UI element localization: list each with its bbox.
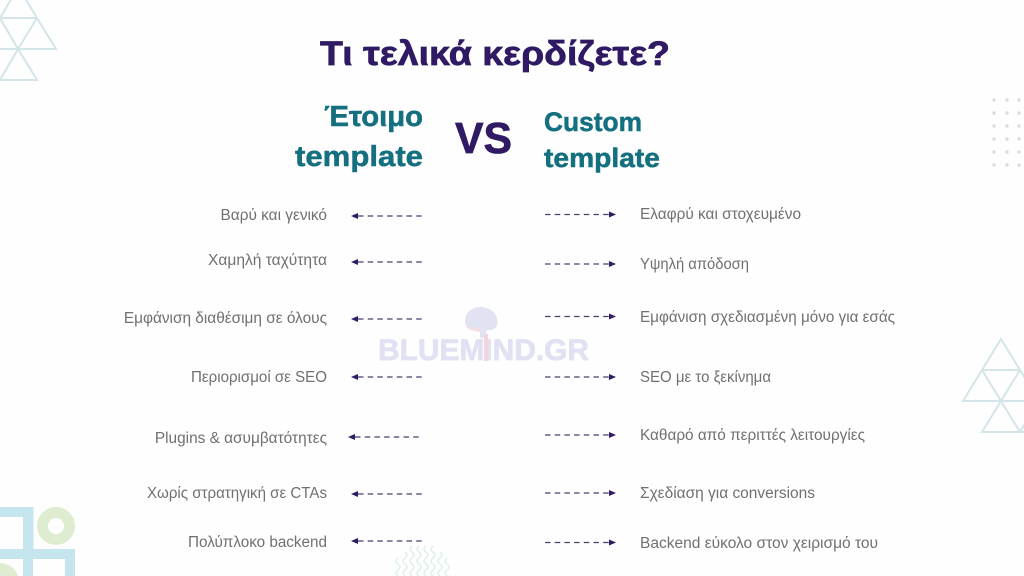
row 1 right (545, 206, 801, 223)
heading: ready template: template (295, 141, 423, 173)
row 7 left: Πολύπλοκο backend (188, 534, 327, 551)
row 5 left (155, 430, 420, 447)
row 4 right: SEO με το ξεκίνημα (640, 369, 771, 386)
row 3 left (124, 310, 423, 327)
row 2 right (545, 256, 749, 273)
heading: ready template (295, 101, 423, 173)
row 3 right: Εμφάνιση σχεδιασμένη μόνο για εσάς (640, 309, 895, 326)
row 4 left (191, 369, 423, 386)
row 7 right: Backend εύκολο στον χειρισμό του (640, 535, 878, 552)
row 3 left: Εμφάνιση διαθέσιμη σε όλους (124, 310, 327, 327)
row 1 left (221, 207, 423, 224)
row 7 left (188, 534, 423, 551)
decoration: blue and green shapes bottom left (0, 507, 75, 576)
row 2 left: Χαμηλή ταχύτητα (208, 252, 327, 269)
row 1 left: Βαρύ και γενικό (221, 207, 327, 224)
row 1 right: Ελαφρύ και στοχευμένο (640, 206, 801, 223)
heading: vs: VS (455, 114, 512, 163)
decoration: dot grid (992, 98, 1021, 167)
title: Τι τελικά κερδίζετε? (320, 35, 670, 73)
row 6 right: Σχεδίαση για conversions (640, 485, 815, 502)
row 2 left (208, 252, 423, 269)
row 6 left (147, 485, 423, 502)
heading: custom template (544, 107, 660, 173)
decoration: waves bottom (396, 546, 449, 576)
row 2 right: Υψηλή απόδοση (640, 256, 749, 273)
row 6 right (545, 485, 815, 502)
heading: custom template: Custom (544, 107, 642, 137)
row 5 left: Plugins & ασυμβατότητες (155, 430, 327, 447)
row 5 right: Καθαρό από περιττές λειτουργίες (640, 427, 865, 444)
heading: ready template: Έτοιμο (324, 101, 423, 133)
watermark: bluemind.gr (378, 307, 589, 367)
decoration: triangles top left (0, 0, 56, 80)
row 4 right (545, 369, 771, 386)
row 4 left: Περιορισμοί σε SEO (191, 369, 327, 386)
watermark: bluemind.gr: BLUEMIND.GR (378, 334, 589, 367)
heading: custom template: template (544, 143, 660, 173)
row 6 left: Χωρίς στρατηγική σε CTAs (147, 485, 327, 502)
decoration: triangles right (963, 339, 1024, 432)
